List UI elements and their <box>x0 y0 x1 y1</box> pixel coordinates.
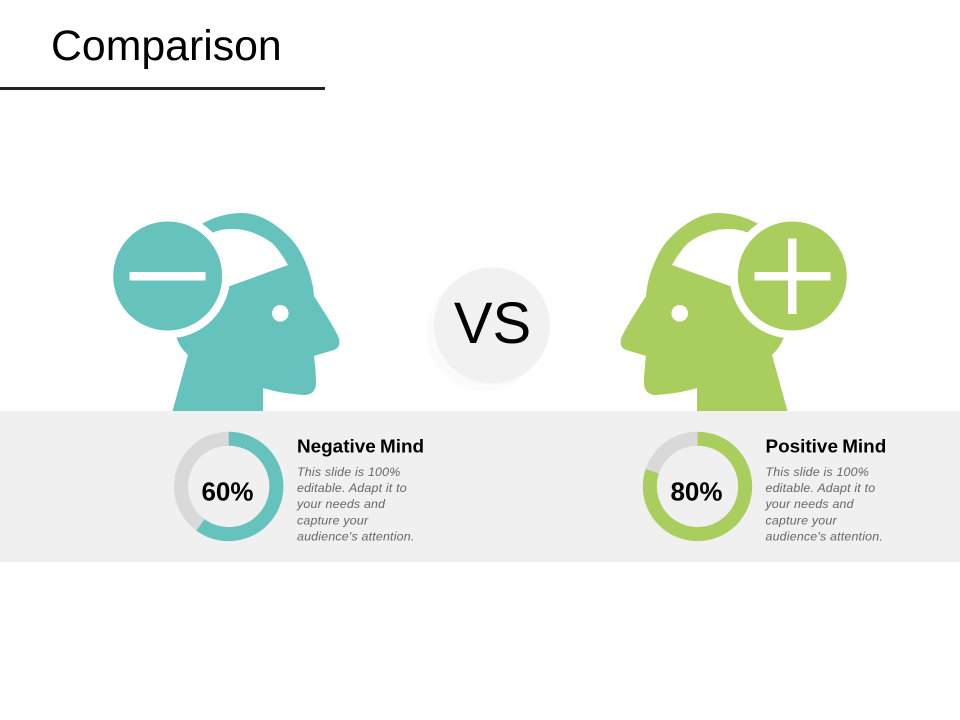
brain cutout <box>200 229 288 290</box>
minus badge <box>113 222 222 330</box>
plus badge <box>738 222 847 330</box>
eye <box>671 305 688 322</box>
description: editable. Adapt it to <box>297 481 407 495</box>
brain cutout <box>672 229 760 290</box>
description: editable. Adapt it to <box>766 481 875 495</box>
circle gap <box>730 214 855 338</box>
plus sign <box>754 238 830 314</box>
title: Comparison <box>51 22 282 70</box>
donut track <box>181 439 276 534</box>
icon: positive mind head <box>621 213 855 411</box>
donut label: 80% <box>670 476 723 506</box>
eye <box>272 305 289 322</box>
heading: Negative Mind <box>297 436 424 458</box>
head silhouette <box>621 213 810 411</box>
donut: 60 percent <box>181 439 276 534</box>
VS label: VS <box>454 291 531 356</box>
donut value <box>181 439 276 534</box>
text block: negative mind <box>296 436 424 544</box>
heading: Positive Mind <box>766 436 886 458</box>
description: audience's attention. <box>297 530 414 544</box>
bottom band <box>0 411 960 562</box>
VS badge <box>426 268 550 391</box>
minus sign <box>130 272 206 280</box>
donut label: 60% <box>201 476 254 506</box>
donut track <box>650 439 745 534</box>
title underline <box>0 87 325 90</box>
description: your needs and <box>296 497 386 511</box>
icon: negative mind head <box>105 213 339 411</box>
head silhouette <box>150 213 339 411</box>
donut value <box>650 439 745 534</box>
description: capture your <box>297 514 369 528</box>
description: This slide is 100% <box>297 465 400 479</box>
circle gap <box>105 214 230 338</box>
description: This slide is 100% <box>766 465 869 479</box>
description: capture your <box>766 514 837 528</box>
description: your needs and <box>764 497 855 511</box>
description: audience's attention. <box>766 530 883 544</box>
VS circle <box>434 268 550 384</box>
donut: 80 percent <box>650 439 745 534</box>
faint offset ring <box>426 275 542 391</box>
text block: positive mind <box>764 436 886 544</box>
